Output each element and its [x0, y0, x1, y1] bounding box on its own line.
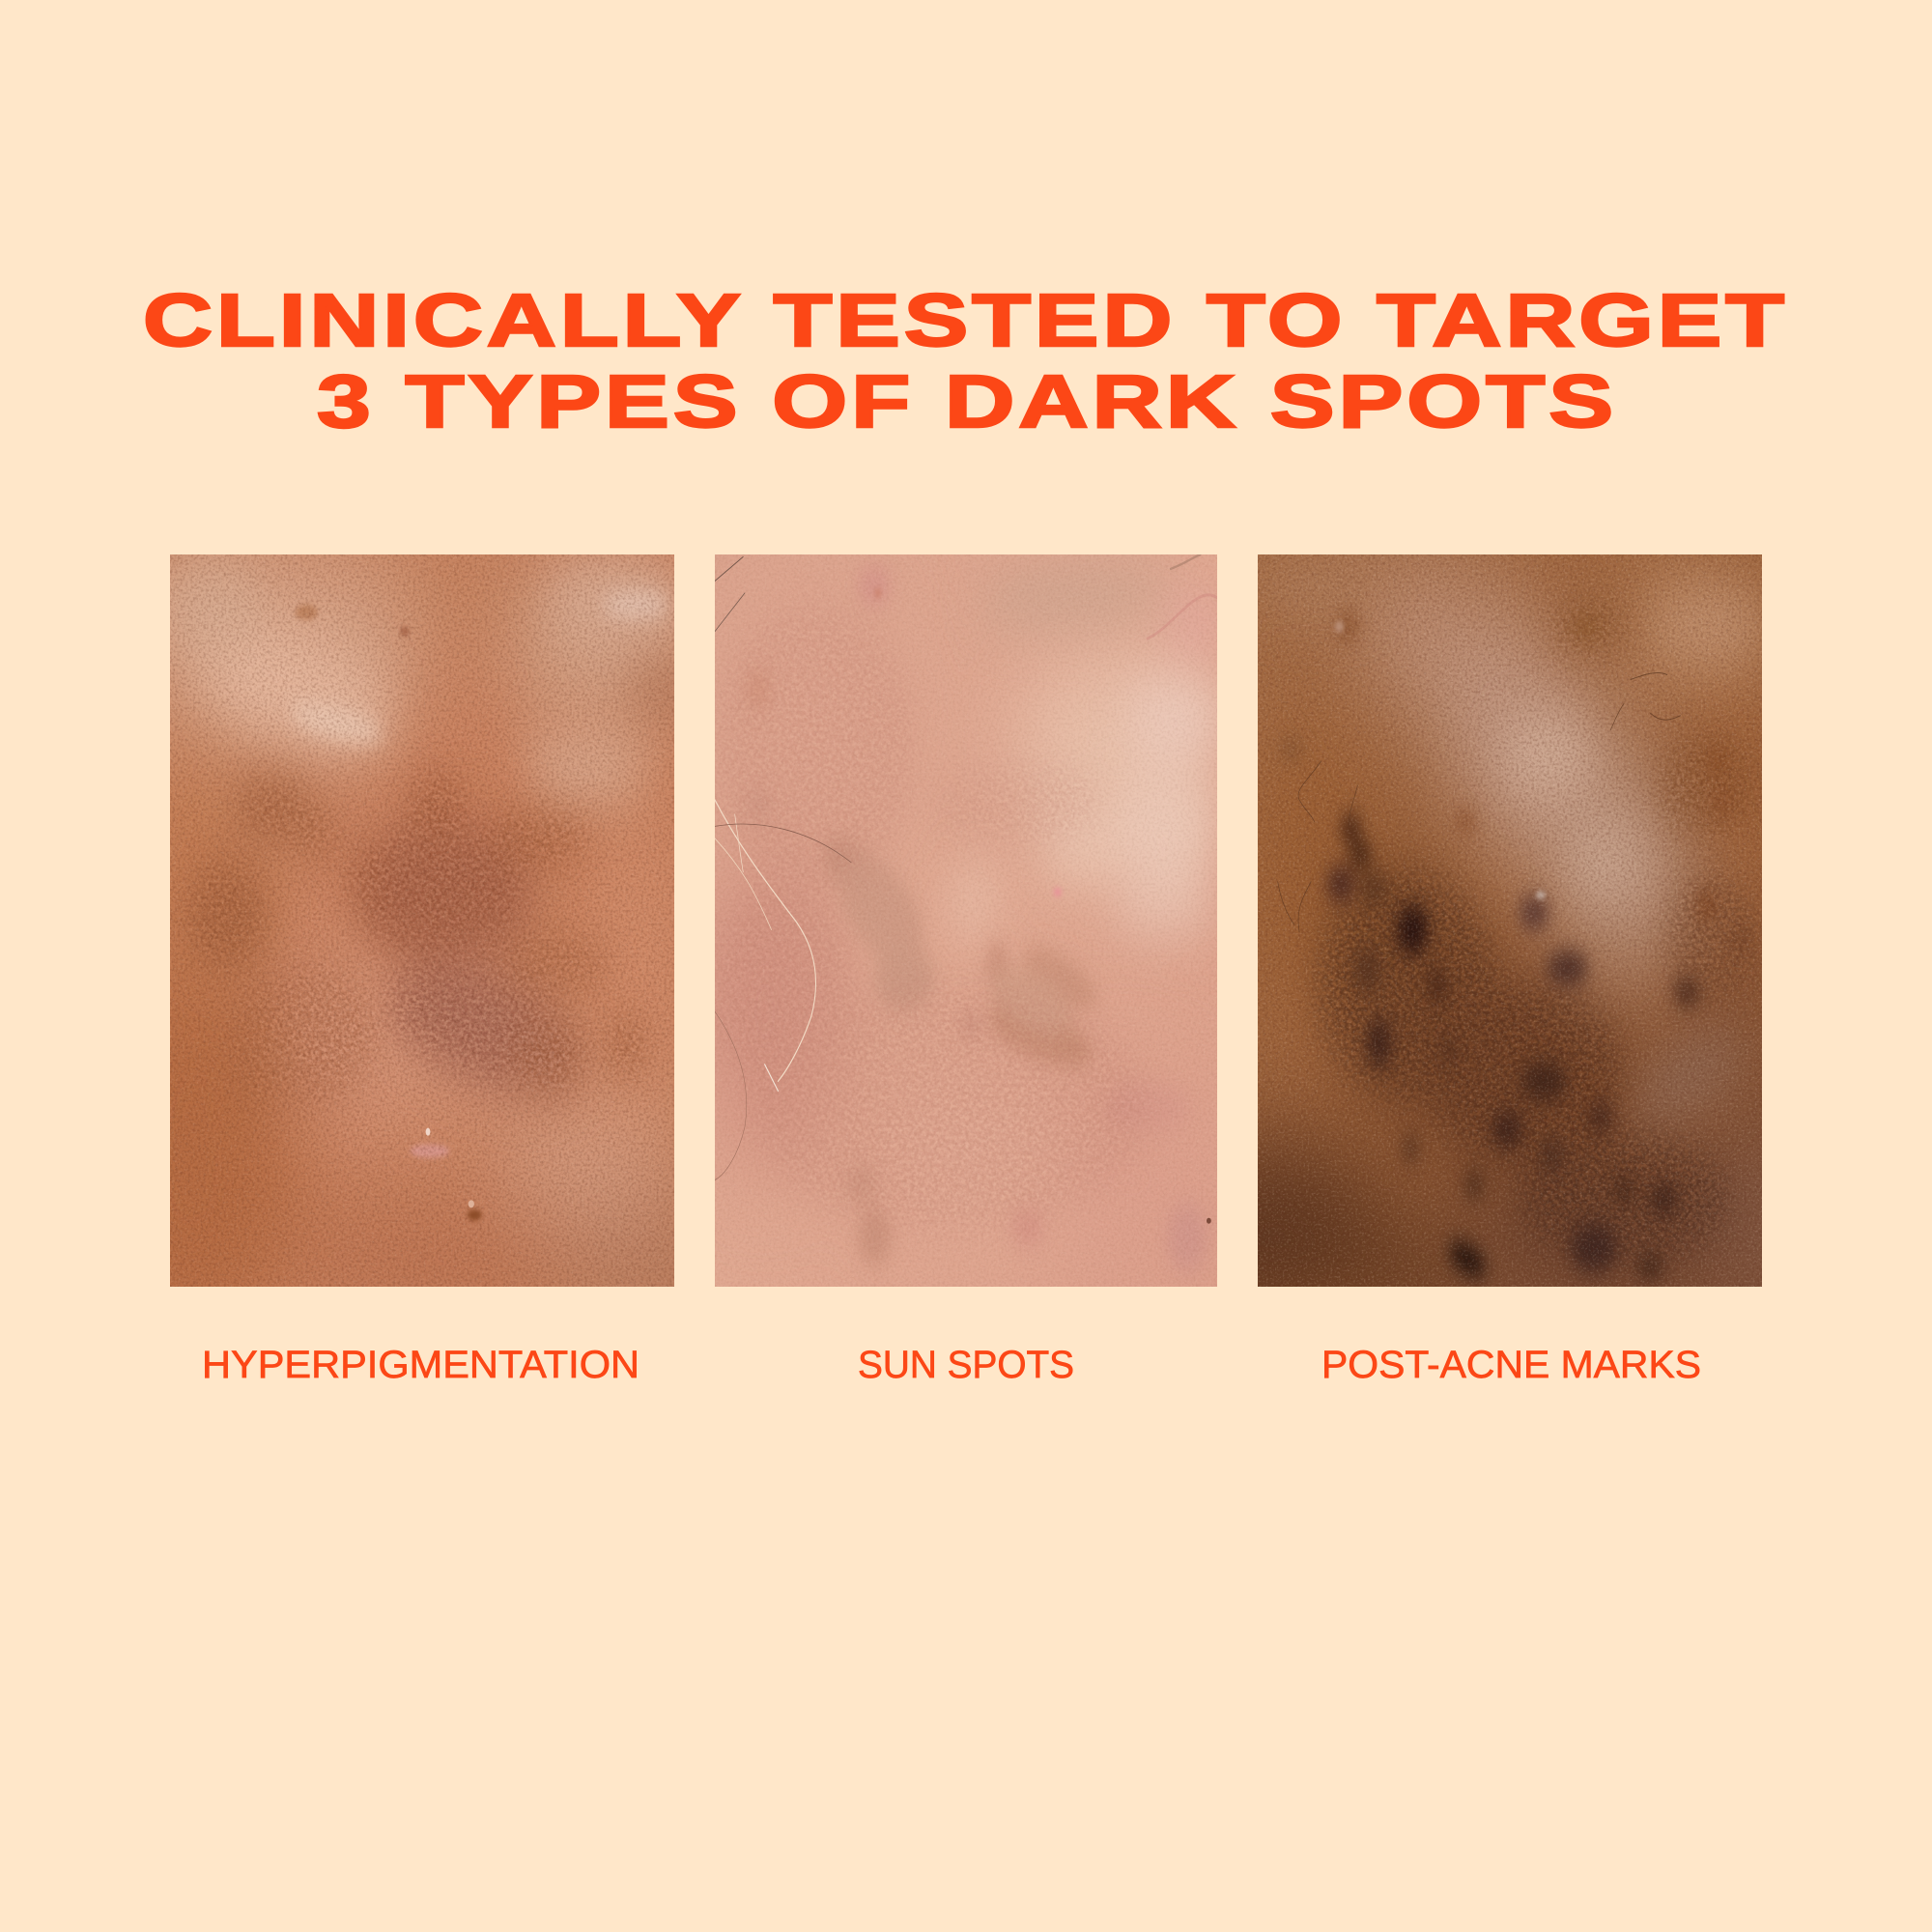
- panel: post-acne marks photo: [1258, 554, 1762, 1287]
- label: sun spots: SUN SPOTS: [858, 1344, 1074, 1386]
- mole: [426, 1128, 482, 1220]
- title: CLINICALLY TESTED TO TARGET: [143, 279, 1788, 362]
- dark patch area: [186, 771, 646, 1113]
- hair strands: [715, 554, 1217, 1179]
- brown marks: [1318, 593, 1760, 1266]
- title: 3 TYPES OF DARK SPOTS: [317, 360, 1617, 443]
- title: [143, 279, 1788, 443]
- panel: hyperpigmentation photo: [170, 554, 674, 1287]
- fine hairs and highlights: [1278, 672, 1681, 932]
- label: hyperpigmentation: HYPERPIGMENTATION: [202, 1344, 639, 1386]
- small red marks: [874, 588, 1211, 1224]
- label: post-acne marks: POST-ACNE MARKS: [1321, 1344, 1701, 1386]
- soft darkening: [359, 819, 539, 973]
- panel: sun spots photo: [715, 554, 1217, 1287]
